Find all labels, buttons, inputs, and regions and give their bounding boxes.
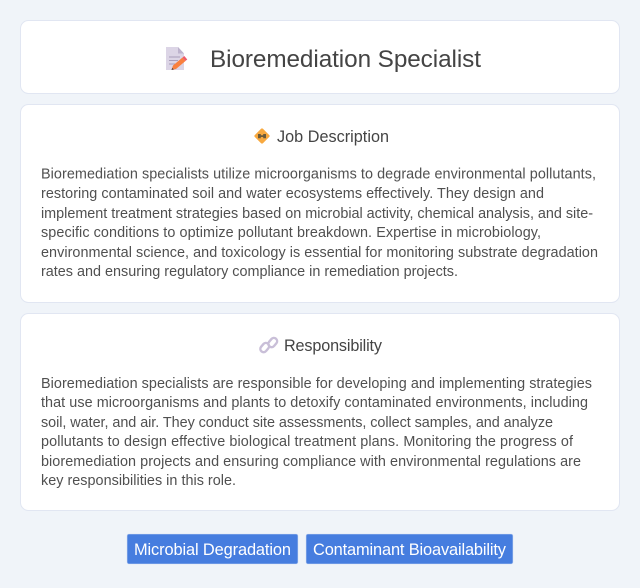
icon: orange diamond <box>254 128 270 144</box>
text block: job description <box>41 166 598 280</box>
text block: job description: rates and ensuring regulatory compliance in remediation projects. <box>41 264 458 280</box>
panel: job description <box>20 104 620 302</box>
text block: job description: environmental science, and toxicology is essential for monitoring substrate degradation <box>41 245 598 261</box>
icon: chain link <box>259 337 278 353</box>
text block: responsibility: that use microorganisms and plants to detoxify contaminated environments, including <box>41 395 588 411</box>
heading: job description: Job Description <box>277 128 389 146</box>
tag: contaminant bioavailability <box>306 534 513 564</box>
text block: responsibility: key responsibilities in this role. <box>41 473 236 489</box>
panel: title card <box>20 20 620 94</box>
text block: responsibility <box>41 376 592 489</box>
tag: microbial degradation: Microbial Degradation <box>134 541 291 559</box>
panel: responsibility <box>20 314 620 510</box>
tag: microbial degradation <box>127 534 298 564</box>
tag: contaminant bioavailability: Contaminant Bioavailability <box>313 541 507 559</box>
text block: responsibility: bioremediation projects and ensuring compliance with environmental regulations are <box>41 454 581 470</box>
text block: job description: specific conditions to optimize pollutant breakdown. Expertise in microbiology, <box>41 225 541 241</box>
heading: responsibility: Responsibility <box>284 337 383 355</box>
text block: job description: implement treatment strategies based on microbial activity, chemical analysis, and site- <box>41 206 593 222</box>
title: Bioremediation Specialist <box>210 46 481 73</box>
icon: document with pencil <box>166 47 187 70</box>
text block: job description: restoring contaminated soil and water ecosystems effectively. They design and <box>41 186 544 202</box>
text block: responsibility: pollutants to design effective biological treatment plans. Monitoring the progress of <box>41 434 574 450</box>
text block: responsibility: soil, water, and air. They conduct site assessments, collect samples, and analyze <box>41 415 553 431</box>
text block: job description: Bioremediation specialists utilize microorganisms to degrade environmental pollutants, <box>41 166 596 182</box>
text block: responsibility: Bioremediation specialists are responsible for developing and implementing strategies <box>41 376 592 392</box>
